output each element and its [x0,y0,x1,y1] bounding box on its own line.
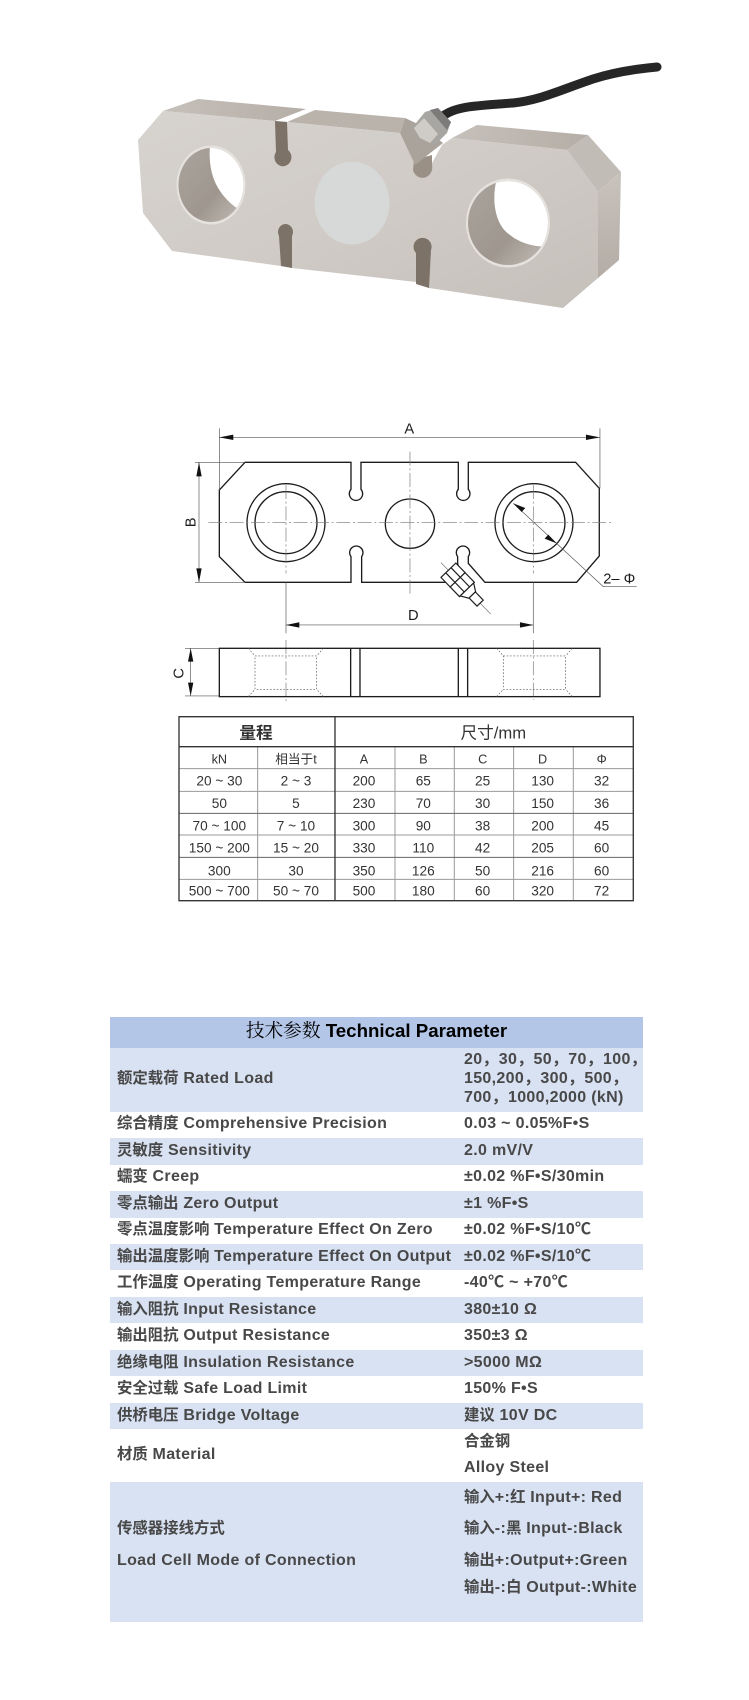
row: output resistance [117,1326,528,1344]
row 500~700: 72 [594,883,609,898]
row 300: 300 [208,863,231,878]
row 50 [212,796,609,811]
top faces [163,99,588,150]
row: material: 材质 Material [117,1446,216,1463]
row: temperature effect on output: ±0.02 %F•S/10℃ [464,1248,591,1265]
row 500~700: 500 ~ 700 [189,883,250,898]
row 150~200: 60 [594,841,610,856]
column headings: 相当于t [275,752,317,766]
centre lines [208,452,612,703]
table grid [179,717,633,901]
row: sensitivity [110,1138,643,1165]
dimension letters: D [408,608,419,624]
row 300 [208,863,610,878]
keyhole slots [274,121,432,288]
row: insulation resistance [110,1350,643,1376]
column headings: kN [212,752,227,766]
row: input resistance [110,1297,643,1323]
row 300: 50 [475,863,491,878]
row: operating temperature range: -40℃ ~ +70℃ [464,1274,568,1291]
cable gland [400,108,451,165]
row: zero output [110,1191,643,1218]
row: rated load: 700，1000,2000 (kN) [464,1089,624,1106]
row: material: Alloy Steel [464,1459,549,1476]
row: safe load limit [117,1380,538,1397]
row 150~200: 42 [475,841,490,856]
row: sensitivity: 灵敏度 Sensitivity [117,1142,252,1159]
row 500~700: 60 [475,883,491,898]
row 500~700: 180 [412,883,435,898]
signal cable [443,67,657,116]
row 70~100: 300 [353,819,376,834]
table header [239,723,526,742]
centre plate [314,162,390,244]
column headings: Φ [597,752,607,766]
row 300: 216 [531,863,554,878]
column headings: B [419,752,428,766]
row: rated load [110,1048,643,1112]
table header: 量程 [239,723,273,742]
row 20~30: 20 ~ 30 [196,774,243,789]
row 70~100: 45 [594,819,610,834]
photo: tension load cell [138,67,657,308]
technical drawing: front and side views [172,421,637,703]
row 50: 150 [531,796,554,811]
row: output resistance: 350±3 Ω [464,1327,528,1344]
row: load cell mode of connection: 输入-:黑 Input-:Black [464,1520,623,1537]
front face [138,111,598,308]
row 300: 60 [594,863,610,878]
table title [110,1017,643,1048]
row: comprehensive precision: 综合精度 Comprehensive Precision [117,1115,387,1132]
row 20~30: 25 [475,774,491,789]
row: load cell mode of connection: 输入+:红 Input+: Red [464,1489,622,1506]
row: load cell mode of connection [110,1482,643,1622]
row 20~30: 32 [594,774,609,789]
right hole [466,178,550,268]
row 500~700: 500 [353,883,376,898]
row: insulation resistance: >5000 MΩ [464,1354,542,1371]
dimension letters: A [404,421,414,437]
row: operating temperature range: 工作温度 Operating Temperature Range [117,1274,421,1291]
row 150~200: 330 [353,841,376,856]
row 20~30: 65 [416,774,431,789]
row 150~200: 150 ~ 200 [189,841,250,856]
table title: 技术参数 Technical Parameter [246,1016,507,1043]
row 70~100 [193,819,610,834]
row 300: 126 [412,863,435,878]
row: sensitivity: 2.0 mV/V [464,1142,533,1159]
row 50: 70 [416,796,431,811]
column headings: D [538,752,547,766]
row 500~700 [189,883,609,898]
row: material [117,1432,549,1476]
row 300: 350 [353,863,376,878]
row 150~200 [189,841,610,856]
row: load cell mode of connection: 输出-:白 Output-:White [464,1579,637,1596]
row 20~30 [196,774,609,789]
row: creep [117,1168,604,1185]
row: temperature effect on output: 输出温度影响 Temperature Effect On Output [117,1248,451,1265]
holes [247,484,573,562]
row: load cell mode of connection: 传感器接线方式 [117,1520,225,1537]
row: bridge voltage: 建议 10V DC [464,1407,558,1424]
dimension letters [172,421,635,679]
row: comprehensive precision [117,1114,590,1132]
row: safe load limit: 150% F•S [464,1380,538,1397]
row: rated load: 150,200，300，500， [464,1070,628,1087]
row: operating temperature range [117,1274,568,1291]
row: safe load limit: 安全过载 Safe Load Limit [117,1380,307,1397]
row 300: 30 [288,863,304,878]
side faces [563,135,621,308]
row 20~30: 130 [531,774,554,789]
row 50: 50 [212,796,227,811]
row: bridge voltage [110,1403,643,1429]
row: bridge voltage: 供桥电压 Bridge Voltage [117,1407,300,1424]
row: load cell mode of connection: 输出+:Output+:Green [464,1552,628,1569]
row 50: 30 [475,796,491,811]
row: input resistance: 输入阻抗 Input Resistance [117,1301,316,1318]
row: temperature effect on zero: 零点温度影响 Temperature Effect On Zero [117,1221,433,1238]
row 150~200: 15 ~ 20 [273,841,319,856]
row 500~700: 50 ~ 70 [273,883,319,898]
side view [219,648,600,697]
row: creep: ±0.02 %F•S/30min [464,1168,604,1185]
row 150~200: 205 [531,841,554,856]
row: output resistance: 输出阻抗 Output Resistance [117,1327,330,1344]
dimension letters: C [172,668,188,679]
row: input resistance: 380±10 Ω [464,1301,537,1318]
column headings: A [360,752,369,766]
row: load cell mode of connection: Load Cell Mode of Connection [117,1552,356,1569]
row 20~30: 200 [353,774,376,789]
row 50: 36 [594,796,609,811]
column headings: C [478,752,487,766]
dimension arrowheads [188,435,600,696]
row 70~100: 90 [416,819,431,834]
row 50: 230 [353,796,376,811]
body outline [219,462,599,582]
row 50: 5 [292,796,300,811]
row 150~200: 110 [412,841,435,856]
row: zero output: 零点输出 Zero Output [117,1195,278,1212]
row: creep: 蠕变 Creep [117,1168,200,1185]
dimension letters: 2– Φ [603,571,635,587]
row: zero output: ±1 %F•S [464,1195,529,1212]
dimension lines [185,428,637,696]
dimension letters: B [183,517,199,527]
row: temperature effect on output [110,1244,643,1270]
row: temperature effect on zero: ±0.02 %F•S/10℃ [464,1221,591,1238]
table header: 尺寸/mm [460,723,526,742]
row: rated load: 20，30，50，70，100， [464,1051,647,1068]
row: material: 合金钢 [464,1433,510,1450]
row: comprehensive precision: 0.03 ~ 0.05%F•S [464,1115,590,1132]
row 70~100: 70 ~ 100 [193,819,246,834]
row: rated load: 额定载荷 Rated Load [117,1070,274,1087]
row 20~30: 2 ~ 3 [281,774,311,789]
row 70~100: 200 [531,819,554,834]
cable connector [434,555,498,621]
row 70~100: 38 [475,819,490,834]
row 500~700: 320 [531,883,554,898]
row: temperature effect on zero [117,1220,591,1238]
row 70~100: 7 ~ 10 [277,819,316,834]
dimension table [179,717,633,901]
left hole [176,146,246,224]
column headings [212,752,607,766]
row: insulation resistance: 绝缘电阻 Insulation Resistance [117,1354,355,1371]
